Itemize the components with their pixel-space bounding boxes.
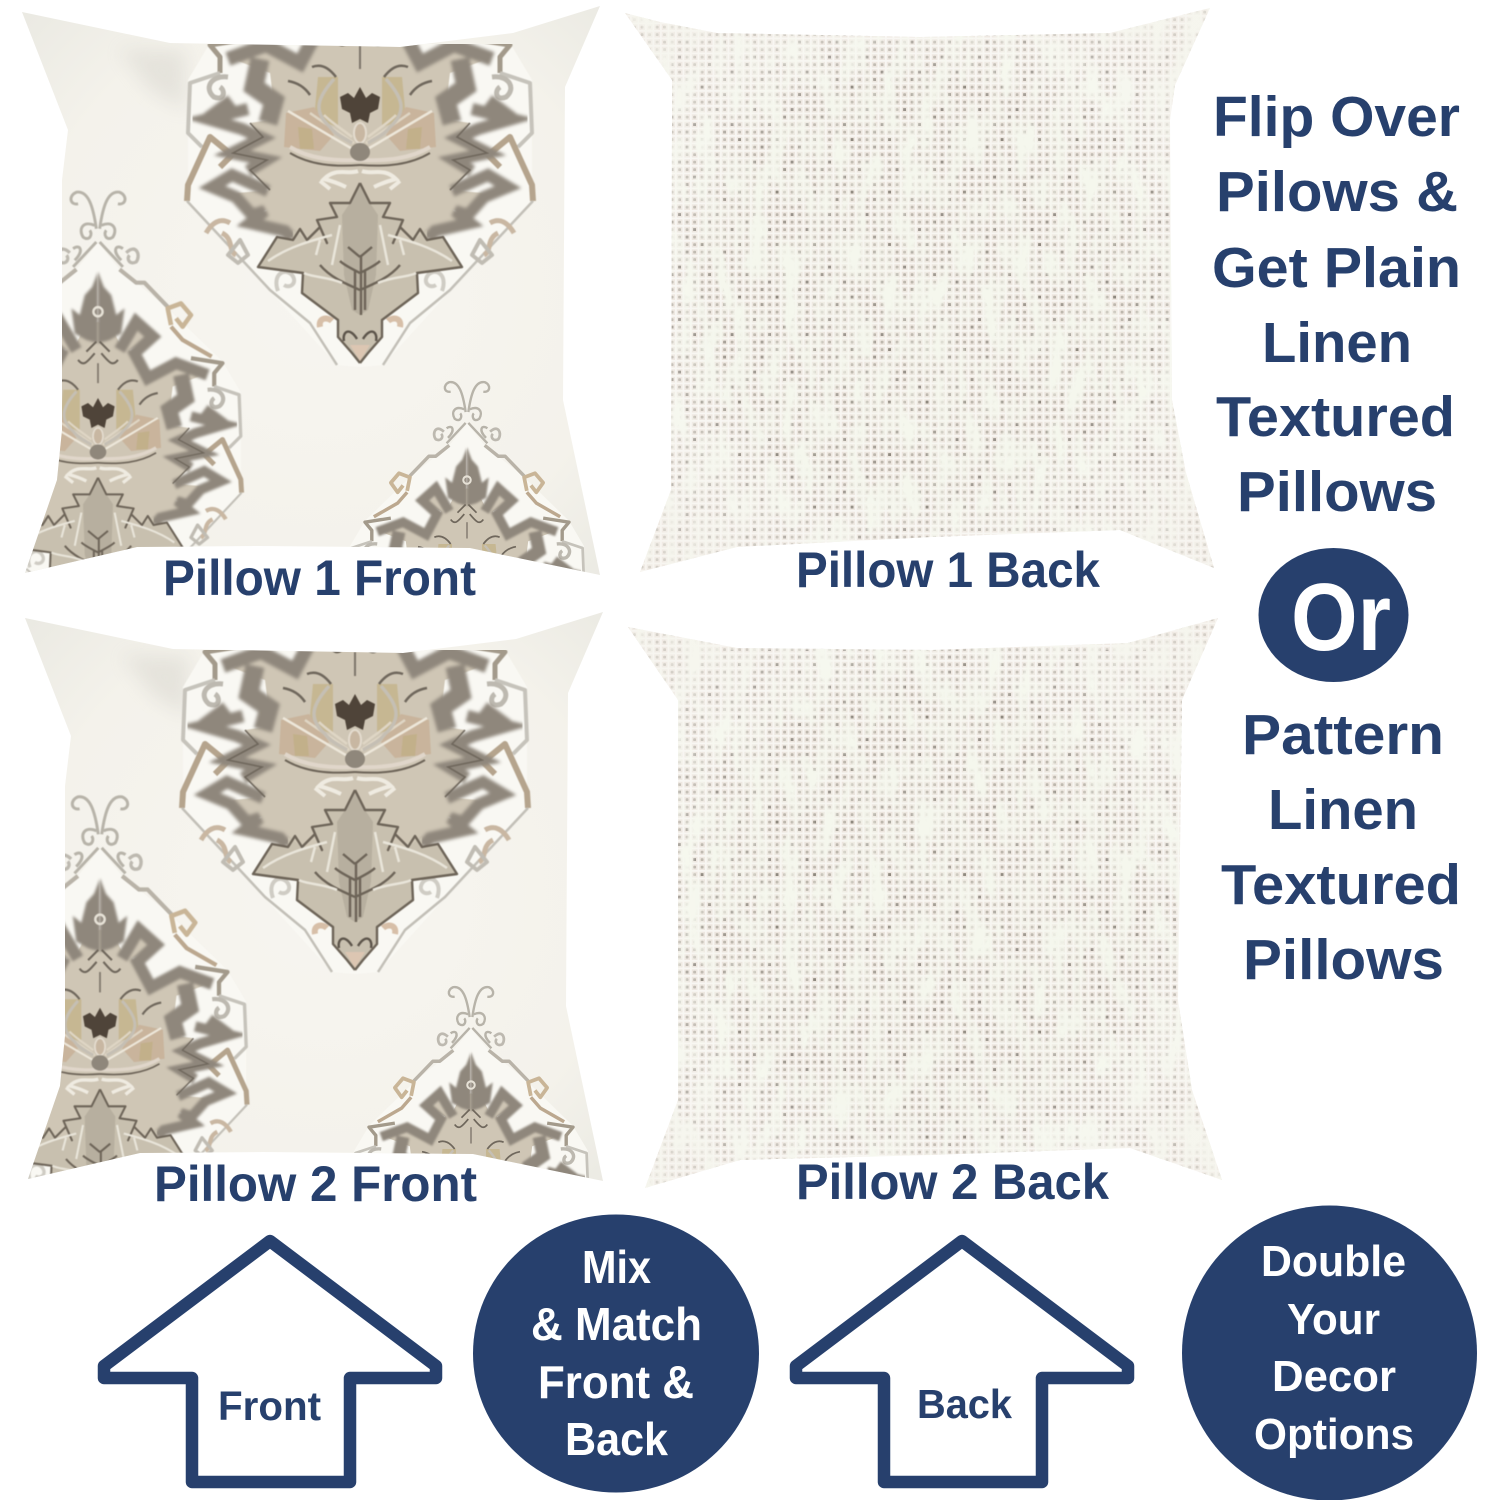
badge: double your decor options: Decor [1272,1352,1396,1401]
arrow: front: Front [218,1383,321,1429]
label: pillow 1 back: Pillow 1 Back [796,542,1100,598]
heading: pattern text [1221,703,1461,992]
heading: pattern text: Pattern [1242,703,1444,767]
badge: mix and match: Front & [538,1356,694,1408]
label: pillow 2 front: Pillow 2 Front [154,1156,477,1212]
heading: flip over text: Pillows [1237,460,1437,524]
badge: mix and match: & Match [531,1298,702,1350]
label: pillow 2 back: Pillow 2 Back [796,1154,1109,1210]
pillow 2 back [620,610,1230,1200]
label: pillow 1 front: Pillow 1 Front [163,550,476,606]
badge: mix and match [473,1214,759,1492]
lower left medallion [26,190,245,572]
badge: mix and match: Mix [582,1241,651,1293]
lower right medallion [354,986,589,1178]
badge: double your decor options: Your [1287,1295,1380,1344]
heading: flip over text: Pilows & [1216,160,1458,224]
arrow: front [104,1241,436,1482]
badge: or [1258,548,1408,682]
lower right medallion [351,380,585,572]
badge: or: Or [1291,564,1391,671]
badge: mix and match: Back [565,1413,668,1465]
heading: flip over text: Textured [1216,385,1455,449]
arrow: back [796,1241,1128,1482]
pillow 1 back [620,0,1220,580]
heading: flip over text: Linen [1262,311,1412,375]
pillow 2 front [25,612,603,1181]
badge: double your decor options [1182,1206,1477,1500]
lower left medallion [28,794,250,1179]
large centre medallion [184,44,536,366]
badge: double your decor options: Double [1261,1237,1406,1286]
heading: pattern text: Linen [1268,778,1418,842]
arrow: back: Back [917,1381,1012,1427]
heading: flip over text: Flip Over [1213,85,1460,149]
heading: pattern text: Pillows [1243,928,1444,992]
badge: double your decor options: Options [1254,1410,1414,1459]
heading: pattern text: Textured [1221,853,1461,917]
pillow 1 front [22,6,600,575]
heading: flip over text [1212,85,1461,524]
large centre medallion [178,650,532,973]
heading: flip over text: Get Plain [1212,236,1461,300]
